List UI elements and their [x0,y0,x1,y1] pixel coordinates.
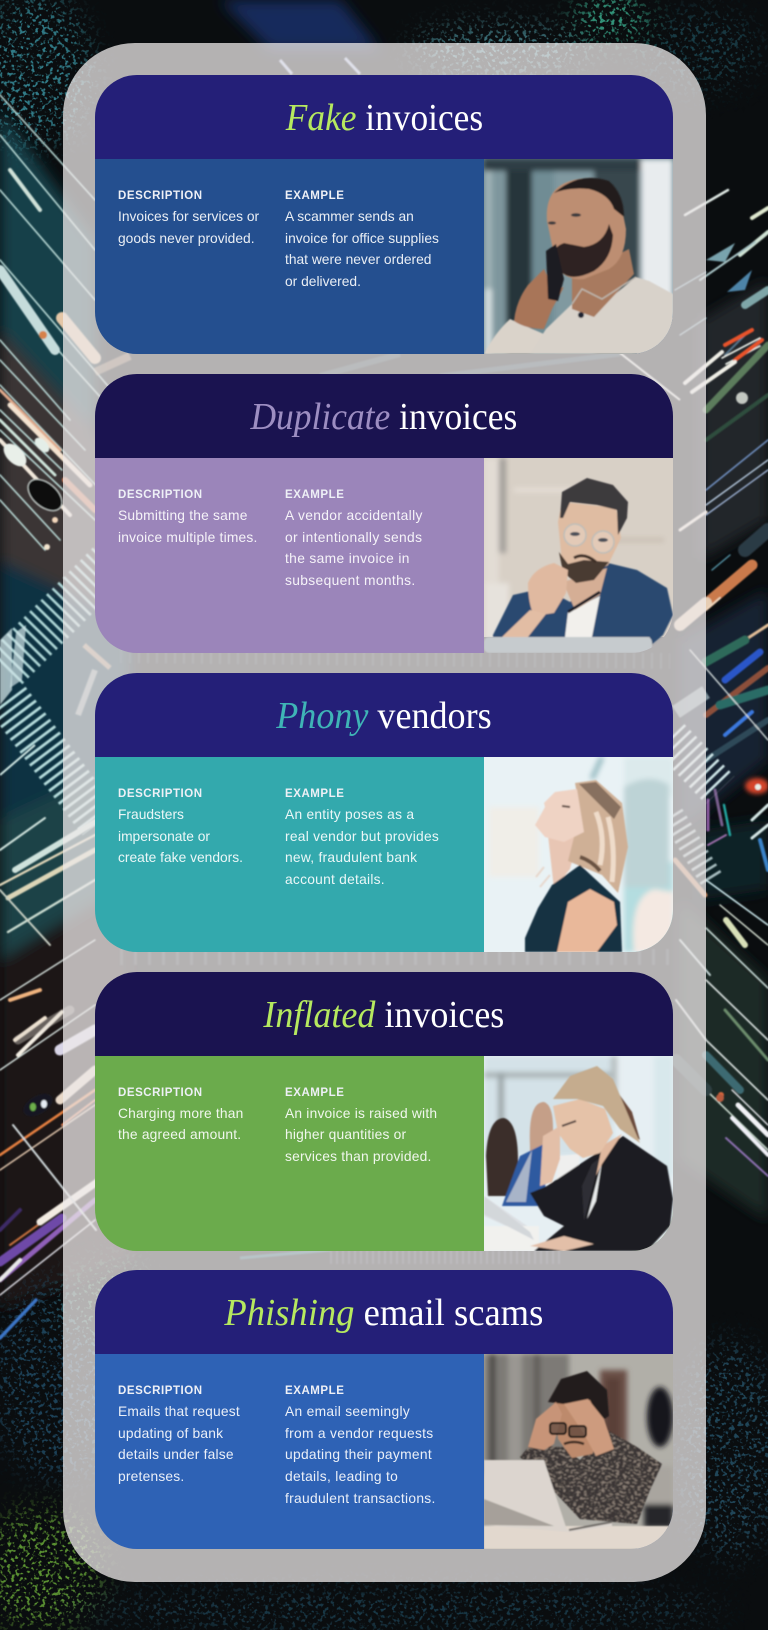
text: example: EXAMPLE [285,1086,344,1098]
text: description: Submitting the same [118,508,248,523]
text: example [285,489,423,588]
text: description: Charging more than [118,1106,244,1120]
text: example: real vendor but provides [285,829,439,844]
text: example: EXAMPLE [285,190,344,202]
text: example: updating their payment [285,1447,432,1462]
outer translucent panel [63,43,706,1582]
text: example: A scammer sends an [285,209,414,224]
text: description [118,489,258,545]
text: example: account details. [285,872,385,887]
text: example: higher quantities or [285,1127,406,1142]
text: example [285,190,439,289]
heading: Phishing email scams [95,1270,673,1354]
text: description: DESCRIPTION [118,489,203,501]
text: description: goods never provided. [118,231,255,246]
text: description: create fake vendors. [118,850,243,865]
panel: Phishing email scams [95,1270,673,1549]
text: description: updating of bank [118,1426,223,1441]
left street streaks, up-right [0,818,100,1338]
heading: Phishing email scams: Phishing email scams [225,1292,543,1334]
left street streaks, down-right [0,95,130,550]
heading: Inflated invoices [95,972,673,1056]
text: description [118,1086,244,1142]
text: example [285,1385,436,1506]
text: example: A vendor accidentally [285,508,423,523]
text: example: invoice for office supplies [285,231,439,246]
text: description: Invoices for services or [118,209,259,224]
text: description: Emails that request [118,1404,240,1419]
text: description: the agreed amount. [118,1127,241,1142]
right street streaks, up-right [675,190,768,870]
photo: man at laptop holding head [484,1354,673,1549]
text: example: An invoice is raised with [285,1106,437,1120]
panel: Inflated invoices [95,972,673,1251]
heading: Phony vendors: Phony vendors [276,695,492,737]
text: example: or delivered. [285,274,361,289]
heading: Fake invoices [95,75,673,159]
text: description: Fraudsters [118,807,184,822]
text: example: An entity poses as a [285,807,414,822]
heading: Duplicate invoices [95,374,673,458]
text: example: details, leading to [285,1469,398,1484]
heading: Duplicate invoices: Duplicate invoices [251,396,517,438]
text: example: fraudulent transactions. [285,1491,436,1506]
photo: stressed woman at meeting [484,1056,673,1251]
panel body [95,1354,673,1549]
panel body [95,458,673,653]
right street streaks, down-right [675,860,768,1176]
text: description: DESCRIPTION [118,1086,203,1098]
panel: Phony vendors [95,673,673,952]
panel: Duplicate invoices [95,374,673,653]
text: example: An email seemingly [285,1404,410,1419]
text: example: services than provided. [285,1149,431,1164]
text: example: EXAMPLE [285,788,344,800]
text: description: DESCRIPTION [118,788,203,800]
text: example [285,1086,437,1164]
heading: Inflated invoices: Inflated invoices [264,994,504,1036]
text: description [118,190,259,246]
text: description [118,1385,240,1484]
text: description: DESCRIPTION [118,1385,203,1397]
text: description: pretenses. [118,1469,184,1484]
text: example: EXAMPLE [285,1385,344,1397]
text: example [285,788,439,887]
text: description: DESCRIPTION [118,190,203,202]
text: description [118,788,243,865]
panel body [95,159,673,354]
photo: man on phone [484,159,673,354]
crosswalk left [0,558,115,822]
text: description: details under false [118,1447,234,1462]
gutter patterns [95,58,720,1258]
text: example: that were never ordered [285,252,431,267]
text: description: impersonate or [118,829,210,844]
panel: Fake invoices [95,75,673,354]
panel body [95,1056,673,1250]
text: example: EXAMPLE [285,489,344,501]
text: example: from a vendor requests [285,1426,433,1441]
text: example: or intentionally sends [285,530,422,545]
panel body [95,757,673,952]
text: example: new, fraudulent bank [285,850,417,865]
heading: Fake invoices: Fake invoices [285,97,483,139]
photo: man with glasses [484,458,673,653]
text: description: invoice multiple times. [118,530,258,545]
heading: Phony vendors [95,673,673,757]
text: example: the same invoice in [285,551,410,566]
photo: woman in profile [484,757,673,952]
text: example: subsequent months. [285,573,416,588]
